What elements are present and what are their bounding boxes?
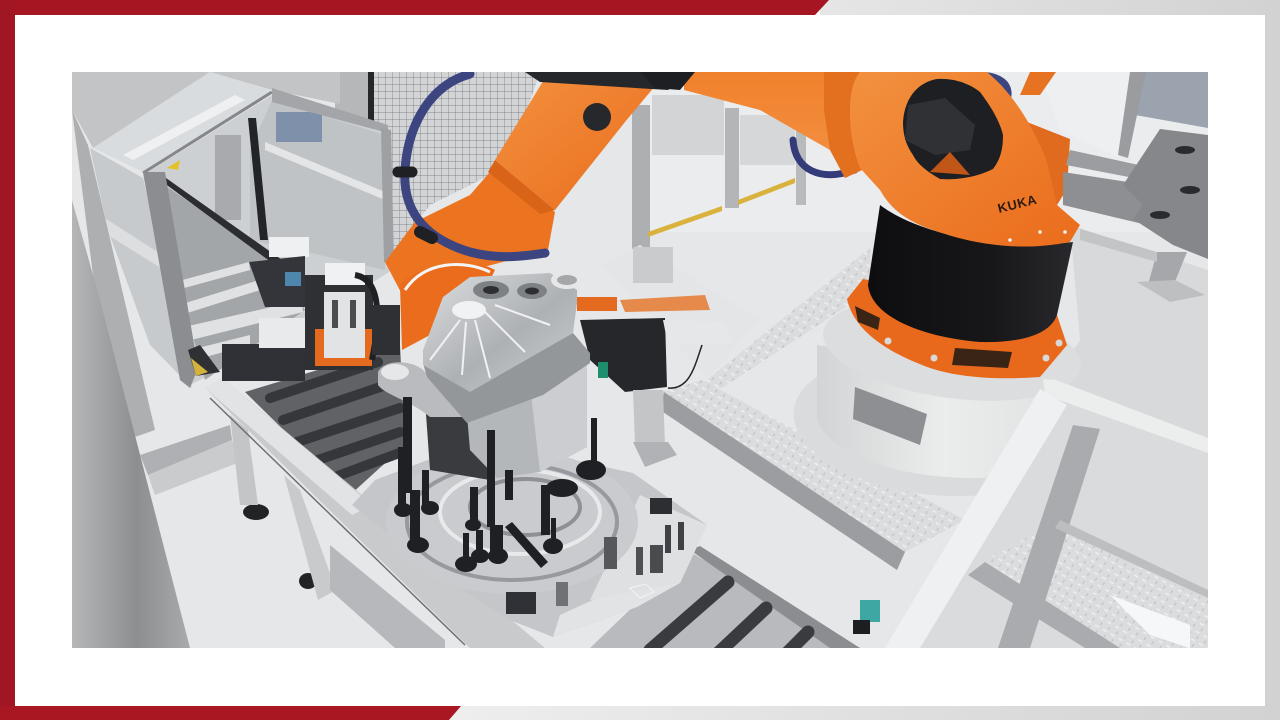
mesh fence: [372, 72, 540, 260]
shoulder opening: [903, 79, 1003, 179]
photo: robot assembly cell: [72, 72, 1208, 655]
walkway upper treadplate: [702, 248, 872, 388]
top cover: [423, 273, 577, 392]
roller bed: [245, 345, 405, 495]
frame: right grey band: [1265, 0, 1280, 720]
ribs: [430, 305, 550, 378]
interior equipment: [215, 100, 385, 270]
grey wall top left: [72, 72, 340, 148]
bores: [473, 281, 509, 299]
fence frame left of mesh: [335, 72, 368, 118]
floor tray: [140, 425, 232, 475]
robot shoulder housing: [850, 72, 1080, 247]
cyan button: [853, 600, 880, 634]
robot wrist, orange: [385, 172, 555, 350]
rollers: [270, 362, 402, 477]
conveyor deck in guard: [160, 182, 305, 380]
gearbox housing: [378, 271, 590, 480]
top right blue-grey background: [1135, 72, 1208, 128]
right background machinery: [1063, 72, 1208, 302]
deck slats: [183, 262, 303, 356]
top right white background: [1040, 72, 1145, 158]
robot arm upper: [488, 72, 670, 214]
under-housing shadow: [425, 400, 490, 480]
frame: bottom grey band: [450, 706, 1280, 720]
walkway main treadplate: [662, 380, 965, 552]
fixture plate: [352, 440, 707, 637]
interior seen through guard: [143, 95, 392, 385]
frame: top red band: [0, 0, 829, 15]
front rollers: [590, 552, 860, 648]
housing flange band: [423, 333, 590, 423]
robot base flange orange: [847, 279, 1067, 378]
back area: [640, 72, 1208, 232]
robot pedestal: base plate: [794, 377, 988, 496]
right tool block: [577, 247, 710, 467]
left guard glass side: [90, 148, 192, 388]
frame: left red band: [0, 0, 15, 720]
back fence posts and yellow rails: [632, 95, 806, 250]
locating pins: [394, 397, 606, 572]
foreground glass guard rails: [885, 379, 1208, 648]
blue cable: [398, 74, 1008, 257]
main conveyor side beam: [205, 378, 545, 648]
guard frame: [143, 92, 272, 173]
bracket arm: [378, 362, 463, 417]
foreground glass area: [900, 395, 1208, 648]
robot forearm: [640, 72, 1056, 178]
KUKA logo: KUKA: [996, 192, 1039, 216]
floor: [72, 72, 1208, 648]
lower case: [467, 355, 587, 478]
right floor: [1069, 228, 1208, 438]
conveyor feet: [243, 504, 317, 589]
left wall foreground: [72, 200, 190, 648]
frame: bottom red band: [0, 706, 461, 720]
conveyor legs: [230, 415, 445, 648]
guard roof glass: [93, 72, 272, 172]
robot black drum: [868, 205, 1073, 342]
robot pedestal: [817, 308, 1074, 478]
walkway foreground treadplate: [991, 535, 1208, 648]
frame: top grey band: [820, 0, 1280, 15]
left tool block with orange: [222, 237, 400, 381]
